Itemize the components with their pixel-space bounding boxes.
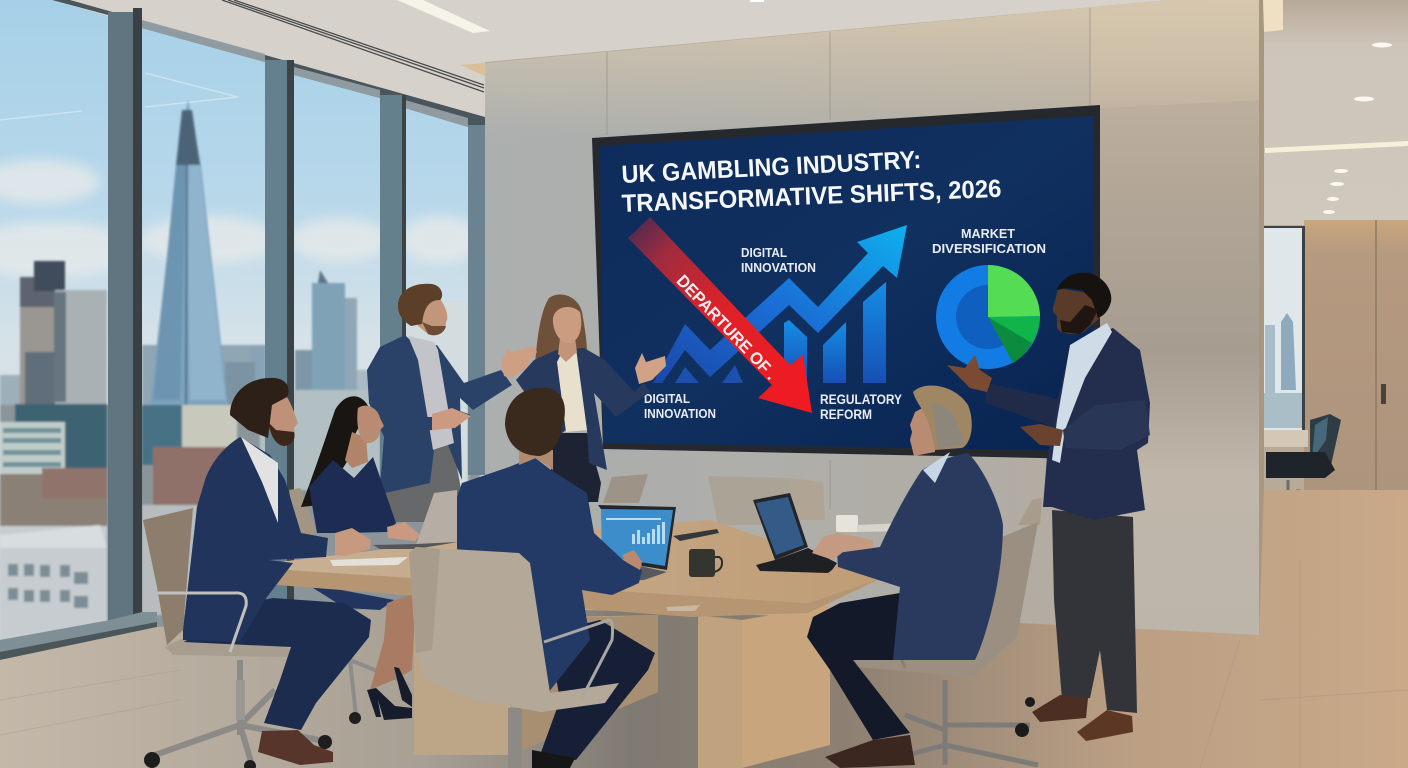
wall panel seams — [607, 8, 1090, 510]
hair — [1057, 273, 1111, 318]
city view through windows — [0, 0, 485, 660]
silver laptop back right — [708, 476, 795, 525]
legs — [370, 593, 416, 690]
label: market diversification: DIVERSIFICATION — [932, 241, 1046, 256]
standing woman presenter — [516, 294, 666, 502]
label: digital innovation upper: DIGITAL — [741, 245, 787, 260]
trousers — [385, 440, 462, 522]
pie chart — [936, 265, 1040, 369]
corridor light strip — [1265, 141, 1408, 153]
wall-mounted presentation screen — [592, 105, 1100, 460]
jacket — [457, 457, 642, 693]
chair seat — [165, 638, 290, 657]
face — [357, 406, 384, 443]
The Shard tower — [150, 100, 228, 405]
right laptop — [753, 493, 837, 573]
label: digital innovation lower: DIGITAL — [644, 391, 690, 406]
seated man right — [807, 386, 1003, 768]
hands — [812, 533, 873, 560]
standing man left presenter — [367, 284, 537, 522]
chair stem — [508, 708, 522, 768]
hand — [335, 528, 371, 556]
corridor floor — [1264, 490, 1408, 768]
collar — [923, 452, 950, 483]
woman's laptop — [373, 490, 458, 549]
label: regulatory reform — [820, 392, 902, 422]
clouds — [0, 160, 480, 278]
lower sleeve — [1063, 400, 1150, 450]
back-facing man trousers — [540, 620, 655, 760]
dress — [309, 457, 396, 533]
contrails — [0, 73, 238, 120]
label: regulatory reform: REGULATORY — [820, 392, 902, 407]
head — [1053, 288, 1100, 334]
corridor downlights — [1323, 42, 1392, 214]
trousers — [1052, 510, 1137, 713]
screen title: UK GAMBLING INDUSTRY: — [621, 146, 922, 189]
hair — [301, 396, 369, 507]
trousers — [807, 593, 975, 740]
door handle — [1381, 384, 1386, 404]
chrome armrest — [158, 593, 246, 652]
conference table — [238, 520, 882, 617]
small note on table — [666, 605, 700, 611]
label: digital innovation upper: INNOVATION — [741, 260, 816, 275]
screen title: TRANSFORMATIVE SHIFTS, 2026 — [621, 175, 1002, 218]
standing man right presenter — [947, 273, 1150, 741]
seated woman — [301, 396, 420, 720]
shoe — [825, 735, 915, 768]
corridor window — [1264, 226, 1305, 431]
foot of back-facing man — [532, 750, 575, 768]
chrome armrest — [544, 620, 613, 698]
chair base — [860, 680, 1038, 768]
table pedestals — [414, 605, 830, 768]
beard — [422, 322, 446, 335]
face — [910, 406, 936, 456]
left hand — [947, 355, 992, 392]
hair — [535, 294, 587, 384]
rear seat back — [1018, 498, 1042, 525]
wood panel wall — [1304, 220, 1408, 492]
hand — [635, 353, 666, 384]
wall end edge — [1259, 0, 1264, 636]
label: market diversification: MARKET — [961, 226, 1015, 241]
trousers — [551, 433, 601, 502]
chair shell — [409, 547, 619, 712]
corridor chair — [1266, 414, 1341, 526]
right hand — [1020, 424, 1063, 446]
hair — [913, 386, 972, 450]
screen title — [621, 146, 1002, 218]
chair back — [143, 508, 193, 645]
blouse — [557, 348, 587, 432]
label: digital innovation lower: INNOVATION — [644, 406, 716, 421]
raised hand — [501, 346, 537, 378]
corridor table — [1264, 430, 1308, 447]
label: digital innovation lower — [644, 391, 716, 421]
seated man left — [158, 378, 371, 765]
chair shell — [853, 522, 1038, 677]
right seated man chair — [853, 498, 1042, 768]
window mullions and frame — [0, 0, 485, 660]
beard — [268, 422, 295, 446]
shoes — [258, 730, 333, 765]
concrete wall — [485, 0, 1264, 636]
growth bars — [675, 282, 886, 383]
trousers — [184, 598, 371, 730]
red decline arrow — [628, 217, 812, 413]
hands — [387, 522, 420, 541]
forearm and lower hand — [380, 408, 471, 437]
white mug — [836, 515, 858, 532]
arrow label: DEPARTURE OF . — [673, 271, 781, 384]
raised arm — [985, 383, 1060, 430]
hair — [230, 378, 289, 438]
jacket — [837, 453, 1003, 660]
notebook right — [857, 523, 907, 532]
seated man left chair — [143, 508, 332, 768]
floor — [0, 490, 1408, 768]
face — [553, 307, 581, 343]
background laptops and chair — [603, 474, 825, 525]
neck — [345, 432, 368, 468]
hair — [398, 284, 442, 326]
foreground beige chair — [409, 547, 619, 768]
dark mug — [689, 549, 722, 577]
skyline buildings — [0, 100, 480, 660]
chair base — [155, 660, 330, 765]
beard — [1060, 305, 1098, 334]
corridor cove light — [1263, 0, 1283, 32]
neck — [558, 338, 577, 362]
blue growth arrow — [653, 225, 907, 383]
warm cove light — [460, 63, 485, 76]
woman chair — [289, 488, 400, 724]
label: market diversification — [932, 226, 1046, 256]
notebook on table — [330, 557, 408, 566]
pen tray — [673, 529, 719, 541]
silver laptop back left — [603, 474, 648, 503]
blazer — [516, 348, 650, 470]
hair — [505, 388, 565, 456]
heels — [367, 688, 412, 720]
ceiling air vent — [222, 0, 484, 92]
corridor — [1263, 0, 1408, 768]
shirt — [241, 437, 278, 523]
skirt — [305, 583, 394, 610]
ceiling downlight — [750, 0, 764, 2]
chrome arm — [883, 600, 982, 668]
shirt — [1052, 323, 1112, 463]
jacket — [1043, 328, 1150, 520]
jacket — [367, 335, 512, 493]
laptop dashboard bars — [606, 518, 665, 544]
back-facing man — [457, 388, 642, 693]
center laptop with dashboard — [582, 505, 676, 582]
face — [266, 397, 298, 445]
ceiling strip light — [397, 0, 490, 33]
back chair — [790, 478, 825, 520]
label: digital innovation upper — [741, 245, 816, 275]
face — [418, 298, 447, 335]
shoes — [1032, 695, 1088, 722]
hand on laptop — [622, 550, 642, 570]
ceiling — [52, 0, 1408, 127]
shirt — [408, 336, 454, 450]
label: regulatory reform: REFORM — [820, 407, 872, 422]
jacket — [183, 437, 328, 642]
neck — [519, 450, 553, 470]
